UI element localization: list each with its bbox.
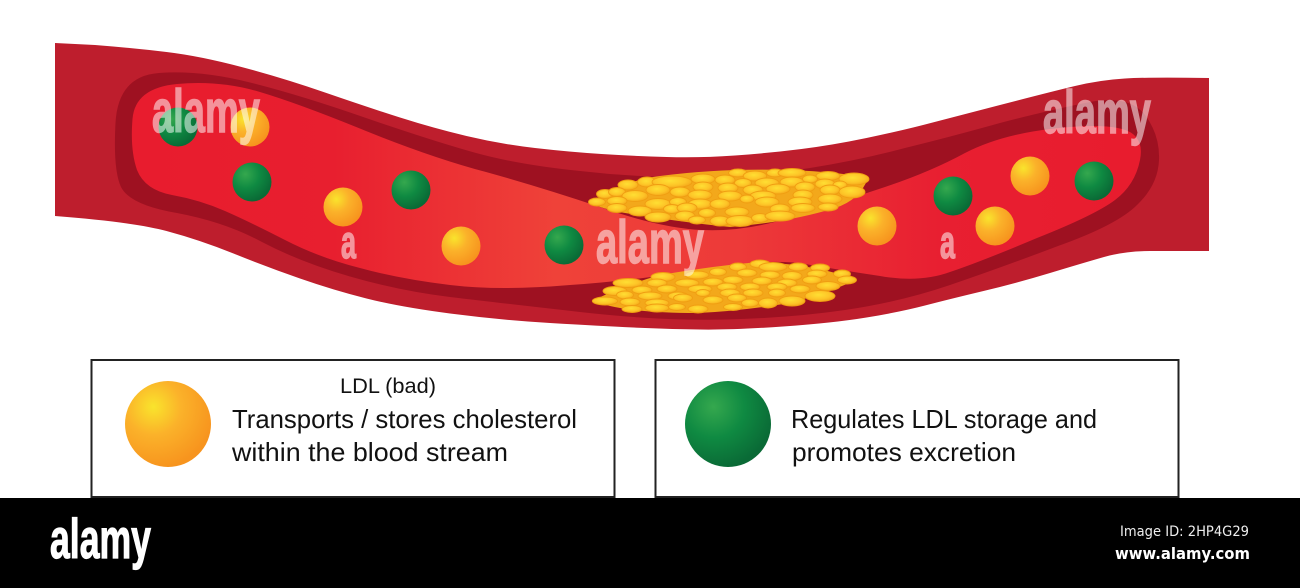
image watermarks: alamy: [596, 209, 704, 276]
HDL description: Regulates LDL storage and: [791, 404, 1097, 434]
image watermarks: a: [940, 216, 955, 268]
upper plaque deposit: [588, 168, 869, 227]
legend panel: LDL: [92, 360, 614, 497]
HDL description: promotes excretion: [792, 437, 1016, 467]
HDL particles: [158, 108, 1114, 264]
image watermarks: alamy: [152, 78, 260, 145]
icon: LDL particle: [125, 381, 211, 467]
plaque base: [592, 262, 856, 313]
HDL description: [791, 404, 1097, 467]
image ID: Image ID: 2HP4G29: [1120, 524, 1249, 540]
legend panel: HDL: [656, 360, 1178, 497]
lumen: [132, 83, 1141, 288]
LDL particles: [230, 108, 1050, 266]
LDL description: within the blood stream: [231, 437, 508, 467]
website: www.alamy.com: [1115, 544, 1250, 563]
plaque base: [590, 170, 868, 227]
outer vessel wall: [55, 43, 1209, 330]
LDL description: Transports / stores cholesterol: [232, 404, 577, 434]
blood vessel: [55, 43, 1209, 330]
lower plaque deposit: [592, 260, 856, 313]
image watermarks: [152, 78, 1151, 276]
image watermarks: alamy: [1043, 79, 1151, 146]
footer logo: alamy: [50, 507, 151, 570]
icon: HDL particle: [685, 381, 771, 467]
LDL heading: LDL (bad): [340, 375, 436, 398]
LDL description: [231, 404, 577, 467]
footer bar: [0, 498, 1300, 588]
image watermarks: a: [341, 216, 356, 268]
inner vessel wall: [115, 72, 1159, 320]
